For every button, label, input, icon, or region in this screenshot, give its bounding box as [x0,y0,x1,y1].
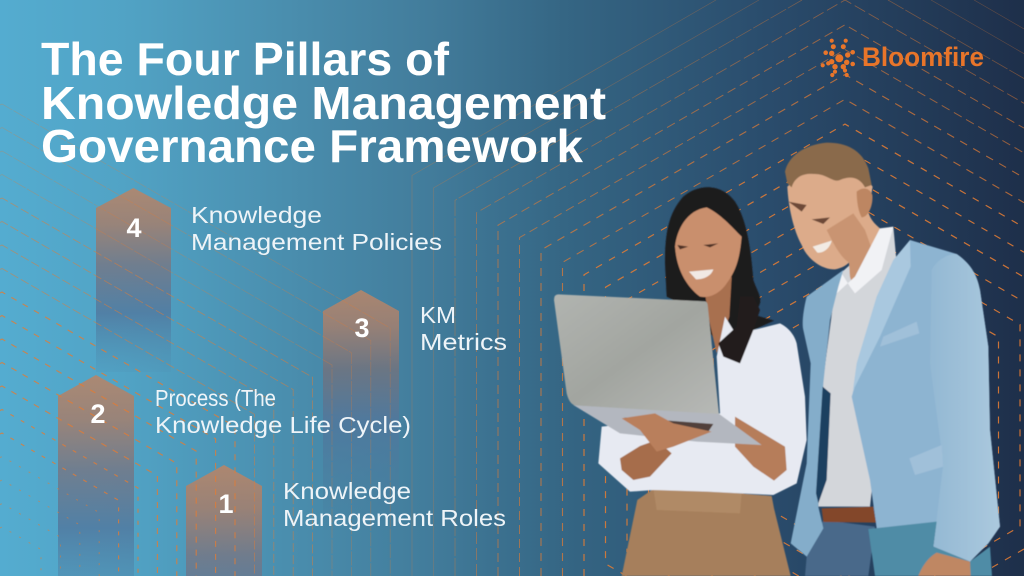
pillar 3 shape [323,290,399,530]
sleeve [930,254,1000,562]
number 3: 3 [354,313,370,343]
ear [857,188,872,217]
jacket dark inner [816,387,831,503]
forearm left [620,440,672,480]
hand on laptop [622,413,712,452]
pillar 1 shape [186,465,262,576]
hair [785,143,872,187]
label: pillar 2 [155,385,411,438]
label: pillar 4: Knowledge [191,202,322,228]
laptop underside shadow [623,417,713,432]
label: pillar 4 [191,202,442,255]
label: pillar 1 [283,478,506,531]
lapel [852,240,911,400]
pillar 2 shape [58,375,134,576]
hair front lock [718,297,760,363]
label: pillar 2: Knowledge Life Cycle) [155,412,411,438]
neck and face [787,170,885,292]
cheek shadow [827,213,873,292]
smile [813,241,832,253]
shirt [818,227,897,507]
eye and brow [788,202,830,224]
pillar 4 shape [96,188,171,372]
label: pillar 3 [420,302,507,355]
pocket flaps [880,322,943,475]
label: pillar 3: Metrics [420,329,507,355]
trousers [805,520,875,576]
collar [837,227,893,293]
label: pillar 1: Knowledge [283,478,411,504]
eyes [677,243,718,249]
dashed hexagon pattern: right [412,0,1024,576]
dashed hexagon pattern: left [0,104,390,576]
logo: Bloomfire [821,39,984,77]
smile [689,269,713,279]
laptop lid [554,294,719,414]
icon: sunburst [821,39,855,77]
forearm right [735,417,787,481]
man [785,143,1000,576]
folder [868,522,992,576]
number 4: 4 [126,213,142,243]
hand [918,553,971,576]
woman [554,187,807,576]
title [41,33,606,172]
number 1: 1 [218,489,234,519]
laptop base [573,405,762,445]
waistband shading [653,488,742,513]
belt [822,507,876,523]
number 2: 2 [90,399,106,429]
wordmark: Bloomfire [862,42,984,72]
photo: two colleagues with laptop [554,143,1000,576]
label: pillar 3: KM [420,302,456,328]
face [675,207,742,297]
title: Knowledge Management [41,77,606,129]
label: pillar 2: Process (The [155,385,276,411]
trousers [622,487,791,576]
hair back [665,187,774,363]
title: Governance Framework [41,120,583,172]
neck [705,277,732,353]
shirt [598,317,807,495]
jacket left panel [791,270,843,557]
jacket main [852,240,1000,562]
label: pillar 1: Management Roles [283,505,506,531]
title: The Four Pillars of [41,33,450,85]
label: pillar 4: Management Policies [191,229,442,255]
